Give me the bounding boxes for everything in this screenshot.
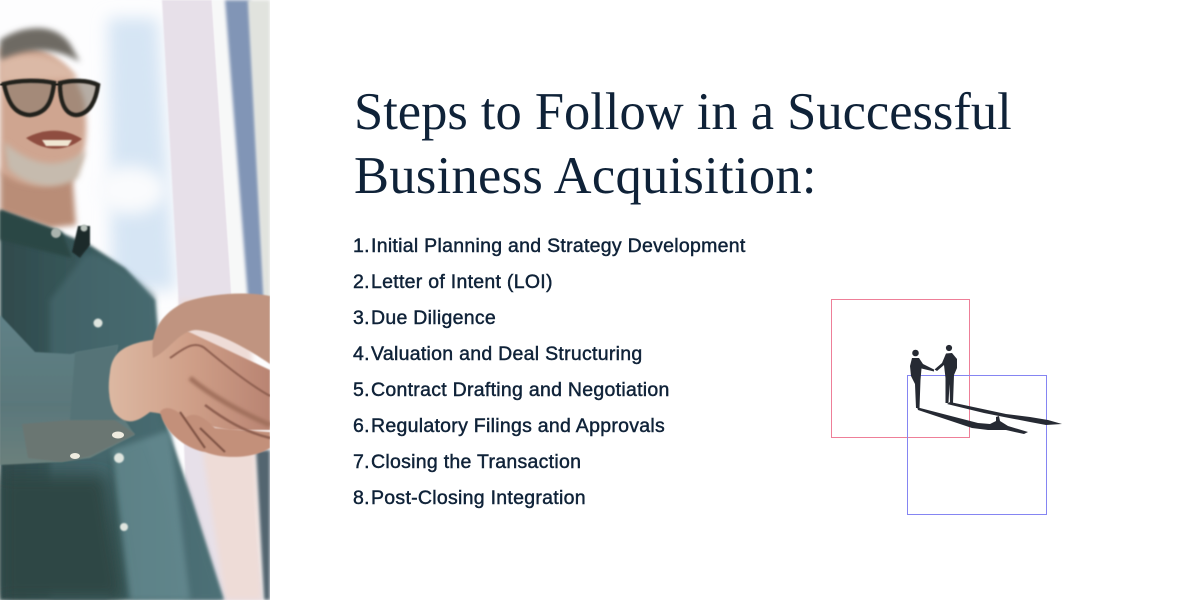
ground shadow of left man — [917, 407, 1028, 434]
step 6: 6. — [353, 415, 370, 437]
man's head with glasses — [0, 28, 98, 228]
step 4: Valuation and Deal Structuring — [371, 343, 642, 365]
shirt — [0, 210, 224, 600]
illustration: two businessmen shaking hands with blue square — [907, 344, 1062, 515]
step 7: Closing the Transaction — [371, 451, 581, 473]
right businessman — [934, 345, 957, 403]
blue square — [908, 376, 1046, 514]
numbered steps list — [353, 235, 746, 509]
title — [354, 83, 1012, 205]
step 4: 4. — [353, 343, 370, 365]
step 6: Regulatory Filings and Approvals — [371, 415, 665, 437]
step 2: 2. — [353, 271, 370, 293]
step 2: Letter of Intent (LOI) — [371, 271, 553, 293]
window background — [0, 0, 270, 600]
step 1: 1. — [353, 235, 370, 257]
photo: smiling man in teal shirt shaking hands — [0, 0, 270, 600]
ground shadow of right man — [947, 402, 1062, 425]
step 7: 7. — [353, 451, 370, 473]
clasped hands — [109, 294, 270, 457]
step 3: 3. — [353, 307, 370, 329]
step 1: Initial Planning and Strategy Development — [371, 235, 746, 257]
step 8: 8. — [353, 487, 370, 509]
step 8: Post-Closing Integration — [371, 487, 586, 509]
title: Steps to Follow in a Successful — [354, 83, 1012, 141]
step 3: Due Diligence — [371, 307, 496, 329]
step 5: Contract Drafting and Negotiation — [371, 379, 670, 401]
pink square — [831, 299, 970, 438]
sleeve — [0, 315, 135, 465]
left businessman — [910, 350, 934, 408]
title: Business Acquisition: — [354, 147, 817, 205]
step 5: 5. — [353, 379, 370, 401]
